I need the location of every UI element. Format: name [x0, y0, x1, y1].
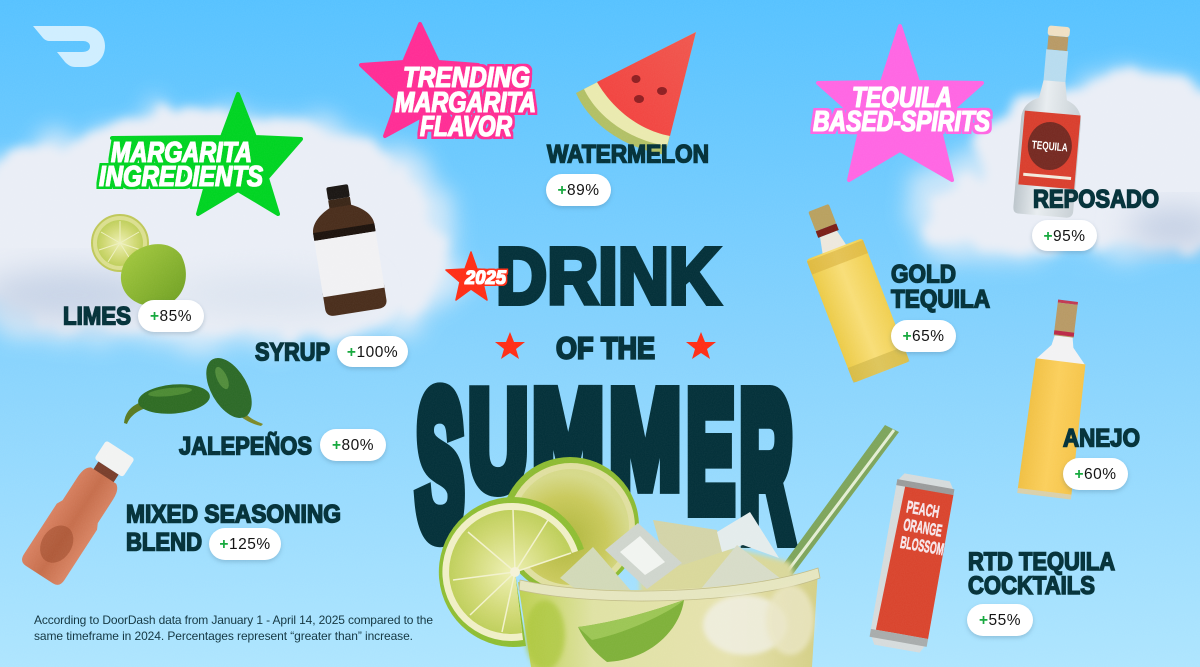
pill: rtd tequila +55%: +55% — [979, 612, 1021, 629]
icon: rtd tequila can: ORANGE — [902, 515, 944, 541]
pill: limes +85% — [138, 300, 204, 332]
star badge: margarita ingredients: INGREDIENTS — [99, 161, 264, 193]
star badge: tequila based-spirits: TEQUILA — [852, 82, 952, 114]
icon: rtd tequila can: BLOSSOM — [899, 533, 945, 559]
pill: syrup +100%: +100% — [347, 344, 398, 361]
title word: SUMMER: M — [609, 363, 681, 517]
title words: OF THE: OF THE — [556, 330, 655, 366]
star badge: margarita ingredients: MARGARITA — [111, 137, 252, 169]
label: gold tequila: TEQUILA — [891, 286, 990, 314]
label: rtd tequila cocktails: RTD TEQUILA — [968, 548, 1115, 576]
back lime slice — [501, 457, 639, 595]
label: rtd tequila cocktails: COCKTAILS — [968, 572, 1095, 600]
pill: jalepeños +80% — [320, 429, 386, 461]
label: gold tequila: GOLD — [891, 260, 956, 288]
icon: limes — [92, 215, 186, 307]
2025 star badge: 2025 — [464, 268, 506, 289]
star badge: trending margarita flavor: TRENDING — [403, 62, 530, 94]
label: anejo: ANEJO — [1063, 424, 1140, 452]
label: reposado: REPOSADO — [1033, 186, 1159, 214]
glass — [518, 568, 820, 667]
label: watermelon: WATERMELON — [547, 140, 709, 168]
DoorDash logo — [33, 26, 105, 67]
icon: rtd tequila can — [868, 472, 956, 654]
2025 star badge — [446, 252, 506, 300]
star badge: tequila based-spirits — [813, 26, 991, 180]
icon: reposado bottle — [1013, 24, 1089, 218]
red star right — [686, 332, 716, 359]
front lime slice — [439, 497, 584, 647]
pill: anejo +60% — [1063, 458, 1128, 490]
ice cubes — [560, 512, 800, 595]
icon: watermelon slice — [576, 32, 696, 155]
icon: syrup bottle — [306, 181, 388, 317]
red star left — [495, 332, 525, 359]
star badge: trending margarita flavor: MARGARITA — [395, 87, 536, 119]
title word: SUMMER — [416, 350, 793, 582]
title word: SUMMER: R — [740, 350, 793, 582]
icon: seasoning bottle — [19, 437, 141, 588]
label: syrup: SYRUP — [255, 338, 330, 366]
straw — [779, 425, 899, 578]
title word: DRINK: DRINK — [496, 232, 720, 320]
pill: rtd tequila +55% — [967, 604, 1033, 636]
title word: SUMMER: S — [416, 351, 464, 579]
lime wedge in glass — [578, 600, 684, 662]
left cloud — [0, 108, 460, 348]
footnote: According to DoorDash data from January 1 - April 14, 2025 compared to the — [34, 613, 433, 627]
label: mixed seasoning blend: MIXED SEASONING — [126, 500, 341, 528]
right cloud — [910, 70, 1200, 260]
label: mixed seasoning blend: BLEND — [126, 528, 202, 556]
icon: rtd tequila can: PEACH — [905, 497, 941, 522]
title word: SUMMER: U — [468, 363, 528, 519]
title word: SUMMER: E — [686, 356, 735, 546]
pill: anejo +60%: +60% — [1074, 466, 1117, 483]
pill: watermelon +89% — [546, 174, 611, 206]
icon: gold tequila bottle — [790, 197, 910, 383]
title word: SUMMER: M — [532, 366, 604, 503]
icon: jalapeños — [124, 350, 263, 426]
footnote: same timeframe in 2024. Percentages represent “greater than” increase. — [34, 629, 413, 643]
cocktail glass with limes, ice and straw — [439, 425, 899, 667]
pill: gold tequila +65%: +65% — [902, 328, 945, 345]
label: limes: LIMES — [63, 302, 131, 330]
pill: mixed seasoning +125% — [209, 528, 281, 560]
star badge: trending margarita flavor — [361, 24, 536, 143]
icon: anejo bottle — [1017, 297, 1095, 500]
pill: syrup +100% — [337, 336, 408, 367]
pill: reposado +95%: +95% — [1043, 228, 1086, 245]
pill: jalepeños +80%: +80% — [332, 437, 374, 454]
pill: limes +85%: +85% — [150, 308, 192, 325]
label: jalepeños: JALEPEÑOS — [179, 430, 312, 460]
heading: 2025 drink of the summer — [416, 232, 793, 582]
star badge: trending margarita flavor: FLAVOR — [420, 111, 512, 143]
pill: mixed seasoning +125%: +125% — [219, 536, 271, 553]
icon: reposado bottle: TEQUILA — [1031, 139, 1068, 155]
pill: gold tequila +65% — [891, 320, 956, 352]
pill: reposado +95% — [1032, 220, 1097, 251]
star badge: margarita ingredients — [99, 94, 301, 214]
pill: watermelon +89%: +89% — [557, 182, 600, 199]
star badge: tequila based-spirits: BASED-SPIRITS — [813, 106, 991, 138]
